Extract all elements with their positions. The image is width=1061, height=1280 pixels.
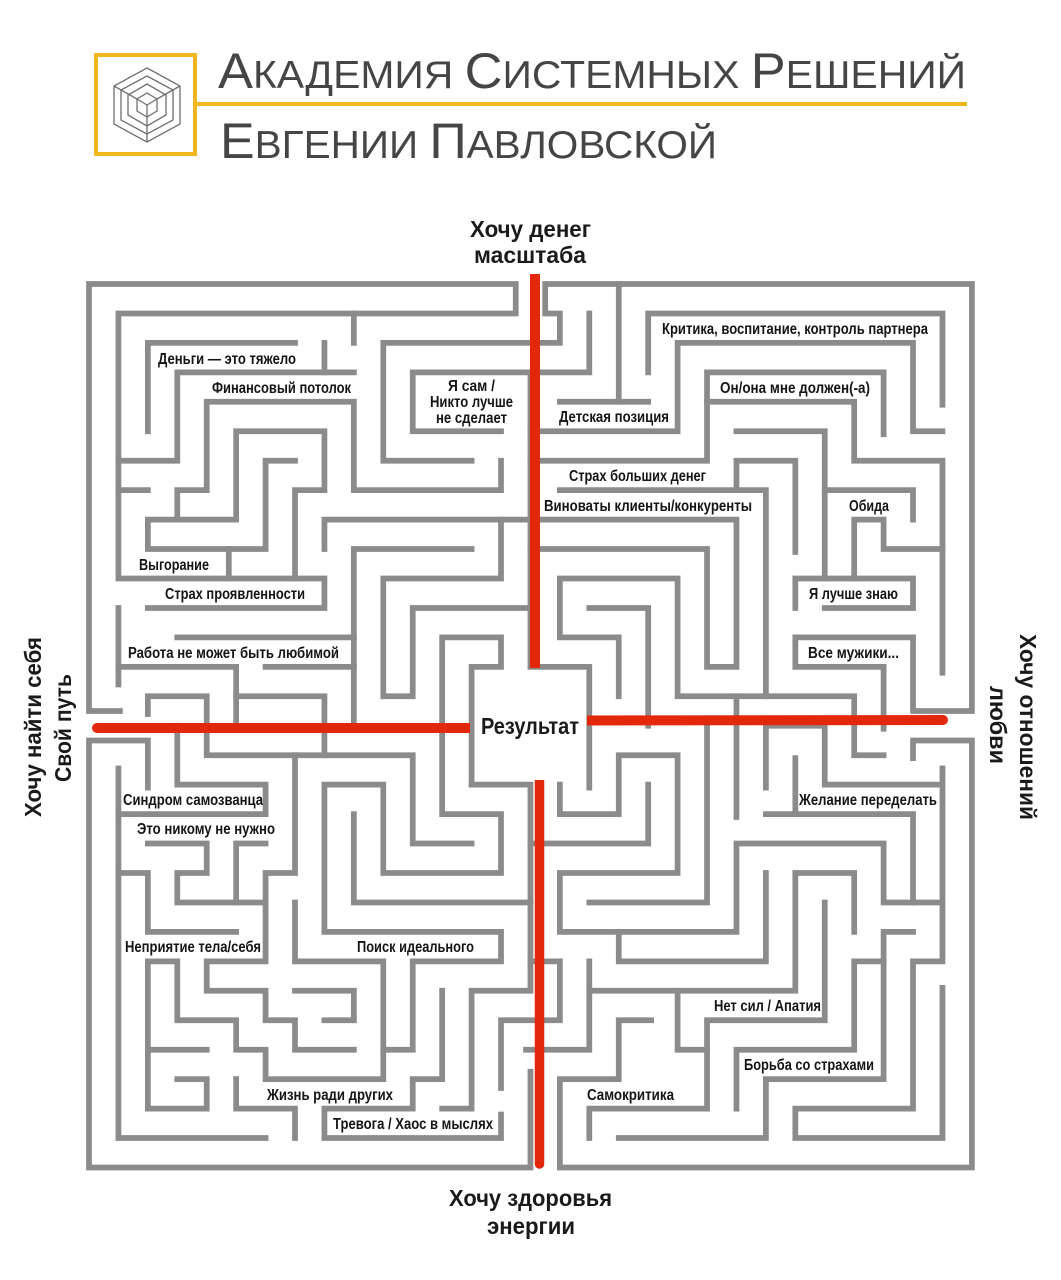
label: nobody does it better: не сделает (436, 410, 507, 427)
label: living for others: Жизнь ради других (266, 1087, 393, 1104)
red path: right (587, 715, 944, 726)
right goal label (985, 634, 1041, 820)
red path: right end cap (938, 715, 948, 725)
bottom goal label: Хочу здоровья (449, 1185, 612, 1211)
label: child position: Детская позиция (559, 409, 669, 426)
right goal label: Хочу отношений (1015, 634, 1041, 820)
top goal label: Хочу денег (470, 216, 591, 242)
label: seeking the ideal: Поиск идеального (357, 939, 474, 956)
label: blame clients: Виноваты клиенты/конкуренты (544, 498, 752, 515)
label: body rejection: Неприятие тела/себя (125, 939, 261, 956)
label: anxiety: Тревога / Хаос в мыслях (333, 1116, 493, 1133)
label: resentment: Обида (849, 498, 889, 515)
label: nobody needs this: Это никому не нужно (137, 821, 275, 838)
title line 1: АКАДЕМИЯ СИСТЕМНЫХ РЕШЕНИЙ (218, 43, 966, 99)
top goal label: масштаба (474, 242, 586, 268)
bottom goal label: энергии (487, 1213, 575, 1239)
label: burnout: Выгорание (139, 557, 209, 574)
left goal label (20, 637, 76, 817)
left goal label: Свой путь (50, 674, 76, 782)
red path: bottom end cap (535, 1159, 544, 1169)
label: I know better: Я лучше знаю (809, 586, 898, 603)
red path: left end cap (92, 723, 102, 733)
header: academy title block (96, 43, 967, 169)
maze walls (89, 284, 972, 1168)
bottom goal label (449, 1185, 612, 1239)
label: no energy: Нет сил / Апатия (714, 998, 821, 1015)
right goal label: любви (985, 686, 1011, 764)
left goal label: Хочу найти себя (20, 637, 46, 817)
label: money is hard: Деньги — это тяжело (158, 351, 296, 368)
label: work cannot be loved: Работа не может быть любимой (128, 645, 339, 662)
label: fear of big money: Страх больших денег (569, 468, 706, 485)
label: self-criticism: Самокритика (587, 1087, 674, 1104)
label: desire to change others: Желание переделать (798, 792, 937, 809)
label: nobody does it better: Я сам / (448, 378, 495, 395)
label: nobody does it better: Никто лучше (430, 394, 513, 411)
top goal label (470, 216, 591, 268)
label: fear of visibility: Страх проявленности (165, 586, 305, 603)
red path: top (530, 274, 540, 668)
logo: yellow square frame with nested hexagon cube (96, 55, 195, 154)
center label: result: Результат (481, 713, 579, 739)
maze labels (123, 321, 937, 1133)
label: fighting fears: Борьба со страхами (744, 1057, 874, 1074)
yellow rule (195, 102, 967, 106)
label: impostor syndrome: Синдром самозванца (123, 792, 263, 809)
label: criticism: Критика, воспитание, контроль партнера (662, 321, 928, 338)
label: nobody does it better (430, 378, 513, 427)
title line 2: ЕВГЕНИИ ПАВЛОВСКОЙ (220, 113, 717, 169)
label: owes me: Он/она мне должен(-а) (720, 380, 870, 397)
label: all men: Все мужики... (808, 645, 899, 662)
red path: left (97, 723, 470, 733)
red path: bottom (535, 780, 544, 1164)
label: financial ceiling: Финансовый потолок (212, 380, 352, 397)
